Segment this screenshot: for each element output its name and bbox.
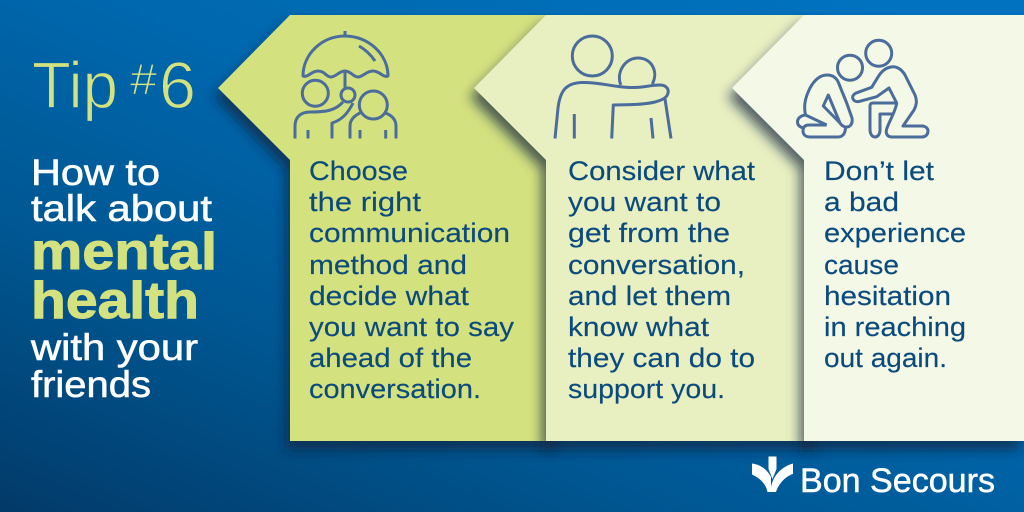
text block: choose: decide what (309, 281, 470, 311)
heading: tip number: 6 (159, 48, 196, 122)
text block: don't let: cause (824, 250, 899, 280)
text block: don't let: a bad (824, 187, 899, 217)
logo: Bon Secours: Bon Secours (800, 462, 995, 500)
text block: choose (309, 156, 515, 404)
text block: choose: the right (309, 187, 422, 217)
text block: don't let: out again. (824, 343, 947, 373)
heading: how to talk about mental health with your friends: mental (31, 223, 217, 281)
text block: choose: you want to say (309, 312, 515, 342)
text block: consider: know what (568, 312, 710, 342)
text block: don't let: in reaching (824, 312, 966, 342)
text block: don't let (824, 156, 966, 373)
text block: don't let: experience (824, 218, 966, 248)
text block: consider: support you. (568, 374, 725, 404)
heading: how to talk about mental health with your friends: health (31, 272, 199, 330)
text block: don't let: hesitation (824, 281, 951, 311)
heading: how to talk about mental health with your friends: with your (30, 327, 198, 368)
icon: people under umbrella (295, 31, 396, 138)
text block: choose: Choose (309, 156, 408, 186)
text block: don't let: Don’t let (824, 156, 935, 186)
text block: choose: conversation. (309, 374, 481, 404)
heading: how to talk about mental health with your friends: talk about (31, 188, 213, 229)
panel: don't let a bad experience (728, 15, 1024, 450)
panel: choose the right communication method (214, 15, 560, 450)
panel: consider what you want (470, 15, 820, 450)
heading: how to talk about mental health with your friends (30, 152, 217, 405)
text block: consider: you want to (568, 187, 721, 217)
heading: tip number: Tip (32, 48, 118, 122)
text block: choose: method and (309, 250, 467, 280)
text block: choose: communication (309, 218, 510, 248)
heading: how to talk about mental health with your friends: friends (31, 364, 151, 405)
heading: tip number: # (130, 55, 158, 104)
text block: consider: they can do to (568, 343, 755, 373)
heading: how to talk about mental health with your friends: How to (31, 152, 160, 193)
text block: consider (568, 156, 756, 404)
text block: consider: get from the (568, 218, 730, 248)
icon: friend with arm around shoulder (555, 36, 671, 138)
logo: Bon Secours (752, 456, 995, 500)
icon: person comforting kneeling person (798, 40, 928, 137)
text block: consider: conversation, (568, 250, 745, 280)
heading: tip number (32, 48, 196, 122)
text block: choose: ahead of the (309, 343, 472, 373)
text block: consider: Consider what (568, 156, 756, 186)
text block: consider: and let them (568, 281, 731, 311)
